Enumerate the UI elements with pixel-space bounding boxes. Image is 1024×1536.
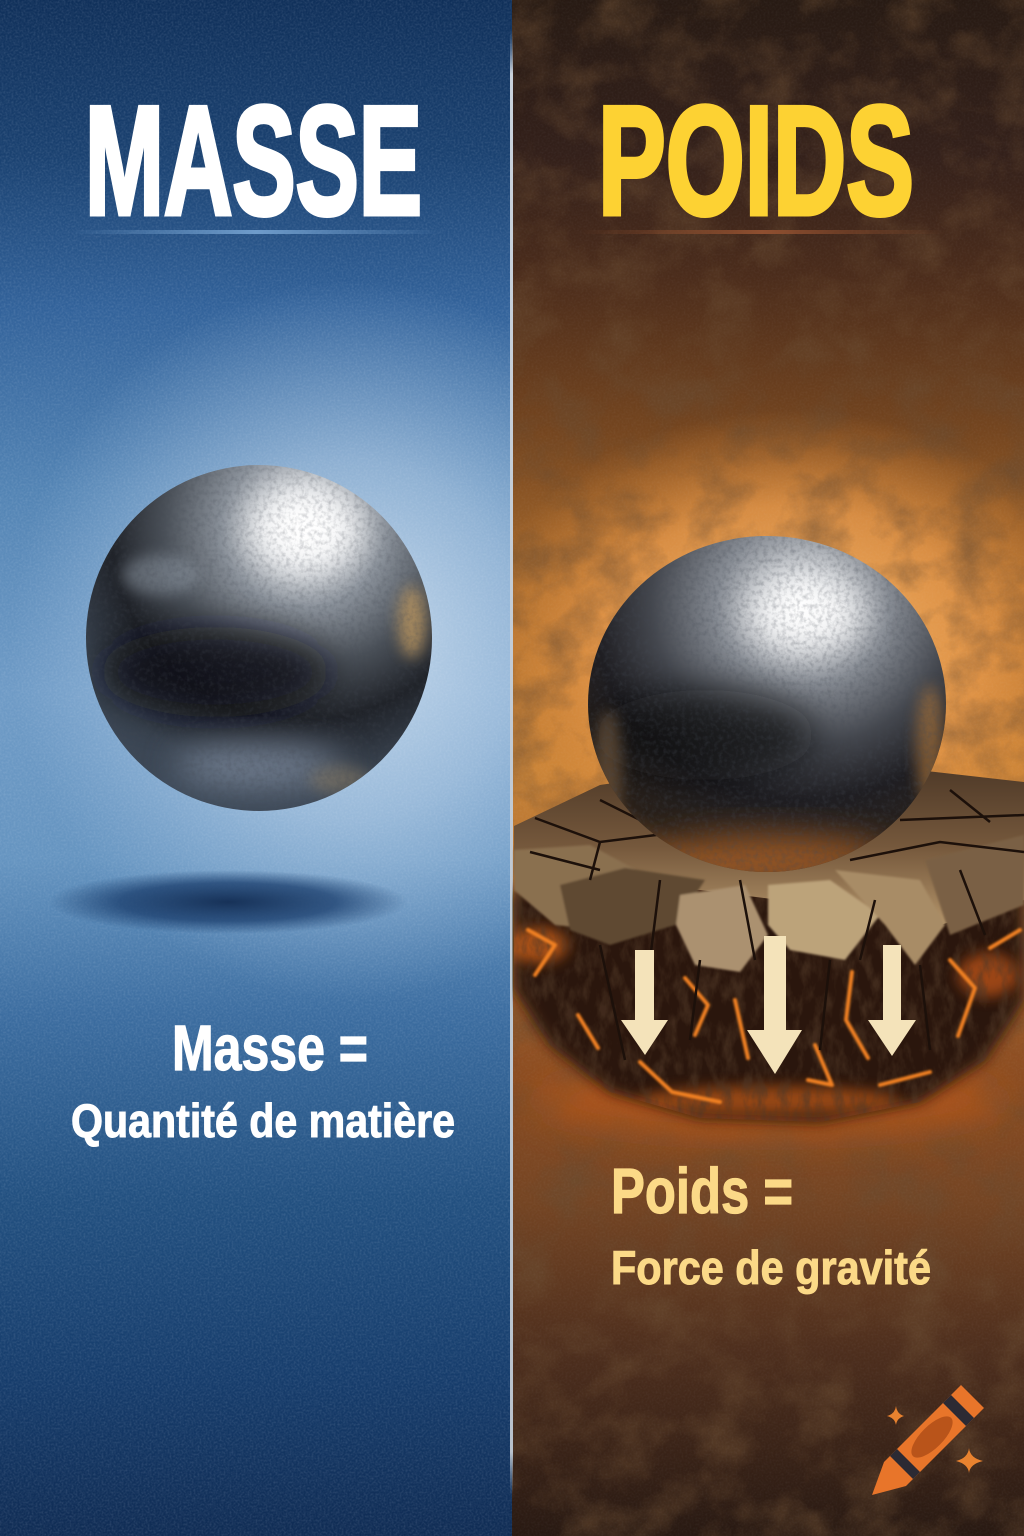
arrow: centre gravity bbox=[747, 936, 802, 1074]
label: poids definition bbox=[611, 1155, 931, 1294]
lava glow inside rock body bbox=[508, 880, 1024, 1125]
shadow under floating sphere bbox=[48, 870, 408, 934]
arrow: right gravity bbox=[868, 945, 916, 1056]
label: masse definition: Quantité de matière bbox=[71, 1094, 455, 1147]
label: poids definition: Poids = bbox=[611, 1155, 793, 1227]
label: masse definition: Masse = bbox=[172, 1012, 368, 1084]
rock chunks front edge bbox=[514, 835, 1024, 972]
floating metal sphere bbox=[86, 465, 432, 811]
title: MASSE: MASSE bbox=[85, 74, 422, 247]
panel: masse (blue background) bbox=[0, 0, 512, 1536]
underline: masse title bbox=[70, 230, 442, 234]
lava cracks bbox=[528, 930, 1020, 1102]
cracked rock top surface bbox=[514, 768, 1024, 925]
resting metal sphere bbox=[588, 536, 946, 884]
label: masse definition bbox=[71, 1012, 455, 1147]
divider line bbox=[510, 30, 513, 1496]
arrow: left gravity bbox=[621, 950, 668, 1055]
icon: sparkles bbox=[887, 1406, 983, 1473]
panel: poids (brown background) bbox=[470, 0, 1024, 1536]
icon: crayon logo bbox=[872, 1385, 984, 1495]
underline: poids title bbox=[580, 230, 945, 234]
label: poids definition: Force de gravité bbox=[611, 1241, 931, 1294]
rock pedestal with lava cracks bbox=[508, 768, 1024, 1138]
